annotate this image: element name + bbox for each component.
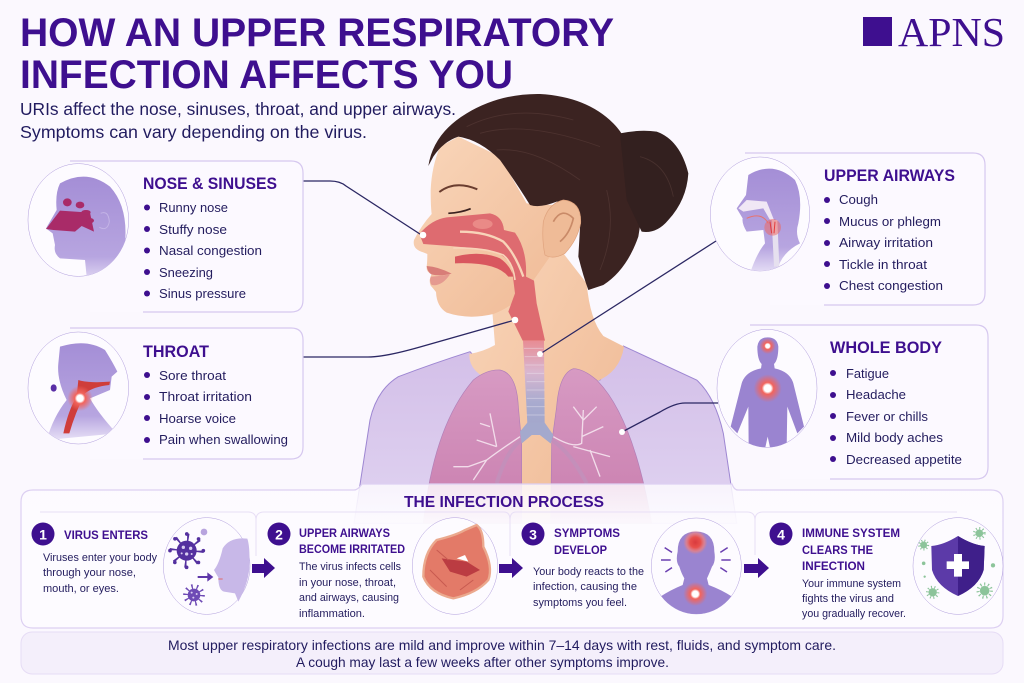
icon: upper airways head <box>710 157 810 273</box>
panel: throat <box>28 328 303 459</box>
list: whole body: Fatigue <box>846 366 889 381</box>
step 4: immune system clears the infection: 4 <box>777 526 785 542</box>
step 2 text: The virus infects cells <box>299 561 401 573</box>
list: whole body: Fever or chills <box>846 409 928 424</box>
list: whole body: Headache <box>846 387 906 402</box>
list: nose and sinuses: Stuffy nose <box>159 222 227 237</box>
step 4: immune system clears the infection: INFECTION <box>802 561 865 573</box>
step 2: upper airways become irritated: BECOME IRRITATED <box>299 544 405 556</box>
list: whole body: Mild body aches <box>846 430 944 445</box>
connector: throat <box>303 317 518 357</box>
footer note <box>21 632 1003 674</box>
sinus bulge <box>473 219 493 229</box>
step 4 text <box>802 578 906 620</box>
left lung <box>423 370 522 523</box>
list: upper airways: Mucus or phlegm <box>839 214 941 229</box>
panel: whole body <box>717 325 988 479</box>
list: nose and sinuses: Sneezing <box>159 265 213 280</box>
step 4: immune system clears the infection: CLEARS THE <box>802 545 873 557</box>
icon: shield and green viruses <box>913 518 1003 614</box>
heading: upper airways: UPPER AIRWAYS <box>824 166 955 185</box>
trachea rings <box>524 348 545 415</box>
step 4 text: Your immune system <box>802 578 901 590</box>
step 4: immune system clears the infection <box>770 518 1003 620</box>
step 2 text: and airways, causing <box>299 592 399 604</box>
face <box>414 137 580 317</box>
icon: inflamed airway <box>412 518 498 614</box>
footer note: Most upper respiratory infections are mild and improve within 7–14 days with rest, fluids, and symptom care. <box>168 637 836 653</box>
step 3 text <box>533 566 644 609</box>
hair strands <box>467 113 673 270</box>
nasal cavity and throat <box>419 213 545 341</box>
shirt <box>354 346 737 523</box>
icon: head with symptom pain points <box>651 518 741 617</box>
turbinates <box>453 232 523 280</box>
step 2: upper airways become irritated <box>268 518 498 620</box>
icon: nose and sinuses head <box>28 164 129 283</box>
list: throat: Sore throat <box>159 368 226 383</box>
logo: APNS <box>898 9 1005 55</box>
hair <box>428 94 641 290</box>
arrow 1 <box>252 558 275 578</box>
step 4 text: fights the virus and <box>802 593 894 605</box>
ear <box>543 200 581 257</box>
list: upper airways: Cough <box>839 192 878 207</box>
step 3: symptoms develop <box>522 518 741 617</box>
list: upper airways: Tickle in throat <box>839 257 927 272</box>
step 3: symptoms develop: SYMPTOMS <box>554 528 620 540</box>
step 4 text: you gradually recover. <box>802 608 906 620</box>
step 2: upper airways become irritated: UPPER AIRWAYS <box>299 528 390 540</box>
bronchial tree <box>453 407 610 480</box>
heading: throat: THROAT <box>143 342 210 361</box>
list: nose and sinuses: Sinus pressure <box>159 286 246 301</box>
step 3 text: infection, causing the <box>533 581 637 593</box>
icon: virus entering face <box>163 518 250 614</box>
right lung <box>551 369 652 523</box>
heading: whole body: WHOLE BODY <box>830 338 943 357</box>
title: INFECTION AFFECTS YOU <box>20 53 513 97</box>
step 1 text <box>43 552 157 595</box>
list: nose and sinuses: Nasal congestion <box>159 243 262 258</box>
heading: nose and sinuses: NOSE & SINUSES <box>143 174 277 193</box>
step 2 text: in your nose, throat, <box>299 577 396 589</box>
step 1: virus enters <box>32 518 250 614</box>
arrow 3 <box>744 558 769 578</box>
arrow 2 <box>499 558 523 578</box>
step 3 text: Your body reacts to the <box>533 566 644 578</box>
step 1 text: Viruses enter your body <box>43 552 157 564</box>
central illustration: woman with airway and lungs <box>354 94 737 523</box>
subtitle: URIs affect the nose, sinuses, throat, and upper airways. <box>20 99 456 119</box>
list: nose and sinuses <box>144 200 262 301</box>
icon: throat head <box>28 332 129 444</box>
step 4: immune system clears the infection: IMMUNE SYSTEM <box>802 528 900 540</box>
list: whole body <box>830 366 962 467</box>
brow eye lips <box>427 185 477 285</box>
step 2 text: inflammation. <box>299 608 365 620</box>
list: upper airways: Airway irritation <box>839 235 933 250</box>
list: throat: Hoarse voice <box>159 411 236 426</box>
panel: upper airways <box>710 153 985 305</box>
list: throat <box>144 368 288 447</box>
bronchi <box>497 440 587 483</box>
trachea <box>520 341 553 443</box>
panel: the infection process <box>21 484 1003 628</box>
step 1 text: through your nose, <box>43 567 136 579</box>
neck and chest <box>469 223 624 523</box>
title: HOW AN UPPER RESPIRATORY <box>20 11 614 55</box>
step 2: upper airways become irritated: 2 <box>275 526 283 542</box>
step 1 text: mouth, or eyes. <box>43 583 119 595</box>
list: throat: Pain when swallowing <box>159 432 288 447</box>
subtitle <box>20 99 456 142</box>
subtitle: Symptoms can vary depending on the virus. <box>20 122 367 142</box>
list: throat: Throat irritation <box>159 389 252 404</box>
connector: whole body <box>619 403 718 435</box>
list: upper airways <box>824 192 943 293</box>
step 1: virus enters: 1 <box>39 526 47 542</box>
heading: the infection process: THE INFECTION PROCESS <box>404 494 604 511</box>
oral cavity <box>455 254 513 277</box>
list: whole body: Decreased appetite <box>846 452 962 467</box>
footer note: A cough may last a few weeks after other symptoms improve. <box>296 654 669 670</box>
panel: nose and sinuses <box>28 161 303 312</box>
list: upper airways: Chest congestion <box>839 278 943 293</box>
connector: nose <box>303 181 426 238</box>
step 3: symptoms develop: 3 <box>529 526 537 542</box>
title <box>20 11 614 97</box>
hair bun <box>620 131 688 232</box>
step 3: symptoms develop: DEVELOP <box>554 545 607 557</box>
list: nose and sinuses: Runny nose <box>159 200 228 215</box>
step 3 text: symptoms you feel. <box>533 597 627 609</box>
connector: upper airways <box>537 241 716 357</box>
step 2 text <box>299 561 401 620</box>
icon: whole body figure <box>717 329 817 447</box>
step 1: virus enters: VIRUS ENTERS <box>64 530 148 542</box>
bifurcation <box>520 423 553 443</box>
